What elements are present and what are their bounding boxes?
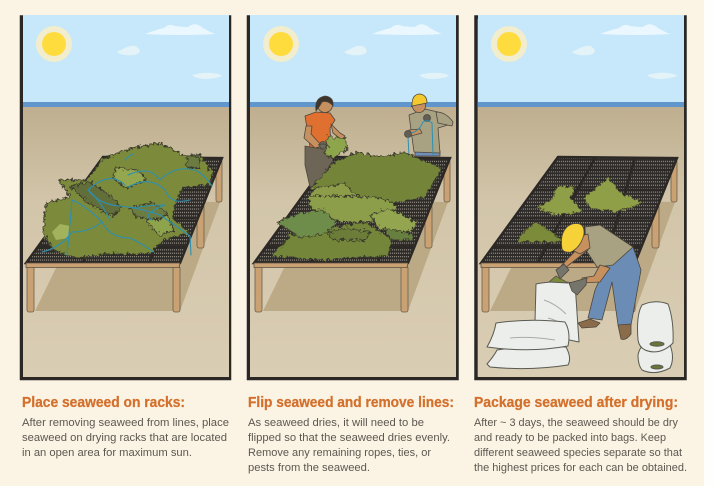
body 2: pests from the seaweed.: [248, 462, 370, 474]
drying rack 1: [26, 157, 222, 312]
body 1: After removing seaweed from lines, place: [22, 417, 229, 429]
drying rack 2: [254, 157, 450, 312]
person: woman in orange: [304, 96, 345, 187]
body 1: [22, 417, 229, 459]
bags: [487, 276, 673, 373]
heading 1: Place seaweed on racks:: [22, 395, 185, 411]
panel: flip seaweed and remove lines: [248, 15, 457, 378]
panel frame 2: [248, 17, 457, 378]
body 1: in an open area for maximum sun.: [22, 447, 192, 459]
body 3: and ready to be packed into bags. Keep: [474, 432, 666, 444]
panel frame 3: [476, 17, 685, 378]
body 2: As seaweed dries, it will need to be: [248, 417, 424, 429]
body 3: [474, 417, 687, 474]
body 3: After ~ 3 days, the seaweed should be dry: [474, 417, 679, 429]
body 2: Remove any remaining ropes, ties, or: [248, 447, 431, 459]
body 2: flipped so that the seaweed dries evenly.: [248, 432, 450, 444]
drying rack 3: [481, 157, 677, 312]
caption: place seaweed on racks: [22, 395, 229, 459]
body 1: seaweed on drying racks that are located: [22, 432, 227, 444]
remaining seaweed: [517, 178, 643, 242]
beach scene 1: [23, 15, 229, 377]
body 3: different seaweed species separate so that: [474, 447, 682, 459]
standing bag: [535, 276, 579, 342]
beach scene 3: [478, 15, 684, 377]
body 2: [248, 417, 450, 474]
held ropes: [408, 121, 433, 155]
stacked bags left: [487, 320, 570, 369]
caption: flip seaweed and remove lines: [248, 395, 454, 474]
seaweed pile 2: [272, 137, 442, 260]
right page margin: [704, 0, 714, 486]
panel frame 1: [22, 17, 230, 378]
person: man in yellow hard hat: [404, 94, 453, 156]
beach scene 2: [250, 15, 456, 377]
body 3: the highest prices for each can be obtained.: [474, 462, 687, 474]
panel: place seaweed on racks: [22, 15, 230, 378]
stacked bags right: [638, 302, 673, 373]
heading 3: Package seaweed after drying:: [474, 395, 678, 411]
panel: package seaweed after drying: [476, 15, 685, 378]
seaweed pile 1: [43, 143, 213, 258]
caption: package seaweed after drying: [474, 395, 687, 474]
rope lines: [42, 154, 212, 255]
heading 2: Flip seaweed and remove lines:: [248, 395, 454, 411]
person: man packing seaweed: [556, 223, 641, 339]
